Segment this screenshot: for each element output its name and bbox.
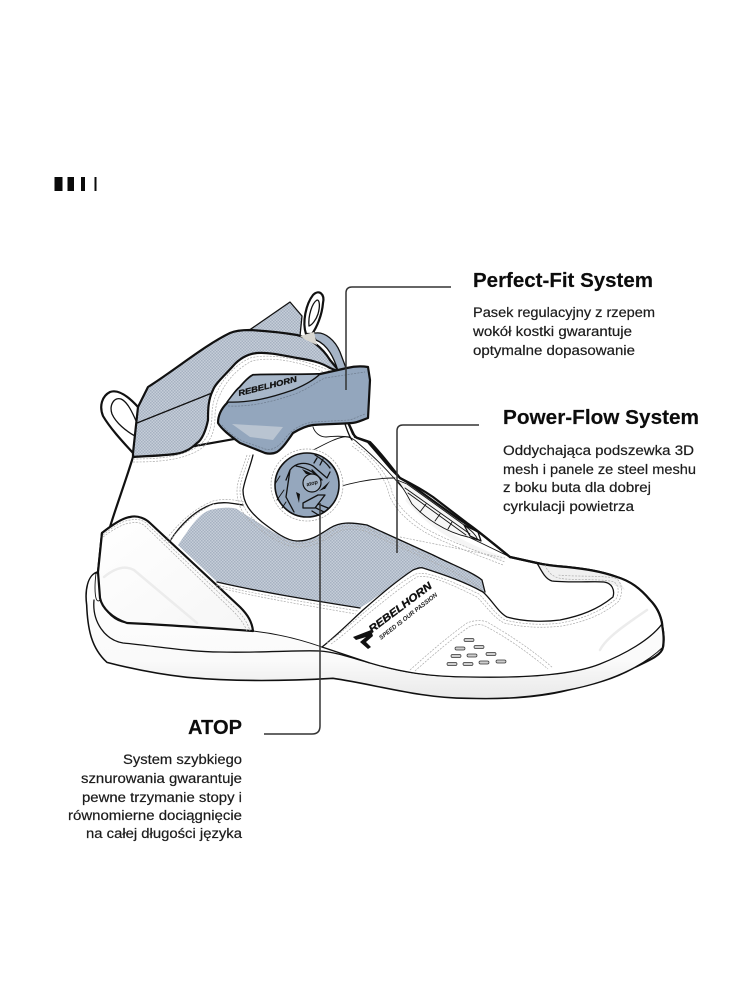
heel mesh seam	[217, 582, 360, 608]
shoe upper silhouette	[86, 420, 664, 698]
forefoot brand logo	[353, 580, 439, 649]
dial hub with brand: atop	[306, 479, 319, 488]
forefoot brand logo: SPEED IS OUR PASSION	[378, 591, 439, 642]
side mesh panel	[178, 508, 485, 608]
icon: brand R mark	[353, 630, 373, 649]
heading: Perfect-Fit System	[473, 270, 653, 292]
icon: rear pull loop	[101, 391, 138, 453]
lacing channel	[345, 420, 510, 557]
description: na całej długości języka	[86, 826, 243, 841]
description: System szybkiego	[123, 752, 242, 767]
strap	[218, 366, 370, 454]
description	[68, 752, 243, 841]
ankle seam lines	[307, 427, 510, 557]
midsole inner line	[94, 600, 370, 663]
callout: Power-Flow System	[503, 407, 699, 514]
callout line: ATOP	[264, 503, 320, 734]
stitching	[103, 356, 621, 671]
strap brand: REBELHORN	[237, 375, 298, 398]
description: optymalne dopasowanie	[473, 343, 635, 358]
description: pewne trzymanie stopy i	[82, 790, 242, 805]
logo panel edge	[322, 568, 483, 647]
forefoot brand logo: REBELHORN	[367, 580, 435, 635]
toe outline	[510, 557, 664, 647]
icon: vent perforations	[447, 638, 506, 666]
description: równomierne dociągnięcie	[68, 808, 242, 823]
ATOP dial	[275, 453, 339, 517]
description: Oddychająca podszewka 3D	[503, 443, 694, 458]
description: Pasek regulacyjny z rzepem	[473, 305, 655, 320]
icon: four vertical progress bars	[54, 177, 96, 191]
ankle panel outline	[243, 455, 485, 592]
description: wokół kostki gwarantuje	[472, 324, 632, 339]
heading: ATOP	[188, 717, 242, 739]
heading: Power-Flow System	[503, 407, 699, 429]
collar inner lining	[312, 333, 346, 371]
midsole band	[86, 573, 664, 698]
description: sznurowania gwarantuje	[81, 771, 242, 786]
soft highlights	[104, 500, 647, 650]
callout: Perfect-Fit System	[472, 270, 655, 358]
description: cyrkulacji powietrza	[503, 499, 635, 514]
rear tongue mesh	[248, 302, 302, 336]
collar seam	[137, 393, 212, 423]
description	[472, 305, 655, 358]
dial stitching ring	[271, 449, 343, 521]
strap upper logo tab	[227, 374, 320, 402]
toe cap sliver	[537, 563, 625, 590]
strap highlight	[232, 424, 283, 440]
description	[503, 443, 696, 514]
description: mesh i panele ze steel meshu	[503, 462, 696, 477]
shoe illustration	[86, 292, 664, 698]
description: z boku buta dla dobrej	[503, 480, 651, 495]
vamp lower edge	[322, 624, 662, 677]
icon: top pull loop	[304, 292, 323, 334]
callout line: Perfect-Fit System	[346, 287, 451, 390]
forefoot logo panel	[322, 563, 661, 677]
callout: ATOP	[68, 717, 243, 841]
callout line: Power-Flow System	[397, 425, 479, 553]
collar mesh panel	[133, 330, 340, 457]
heel counter panel	[98, 516, 253, 631]
strap stitching	[228, 372, 365, 406]
